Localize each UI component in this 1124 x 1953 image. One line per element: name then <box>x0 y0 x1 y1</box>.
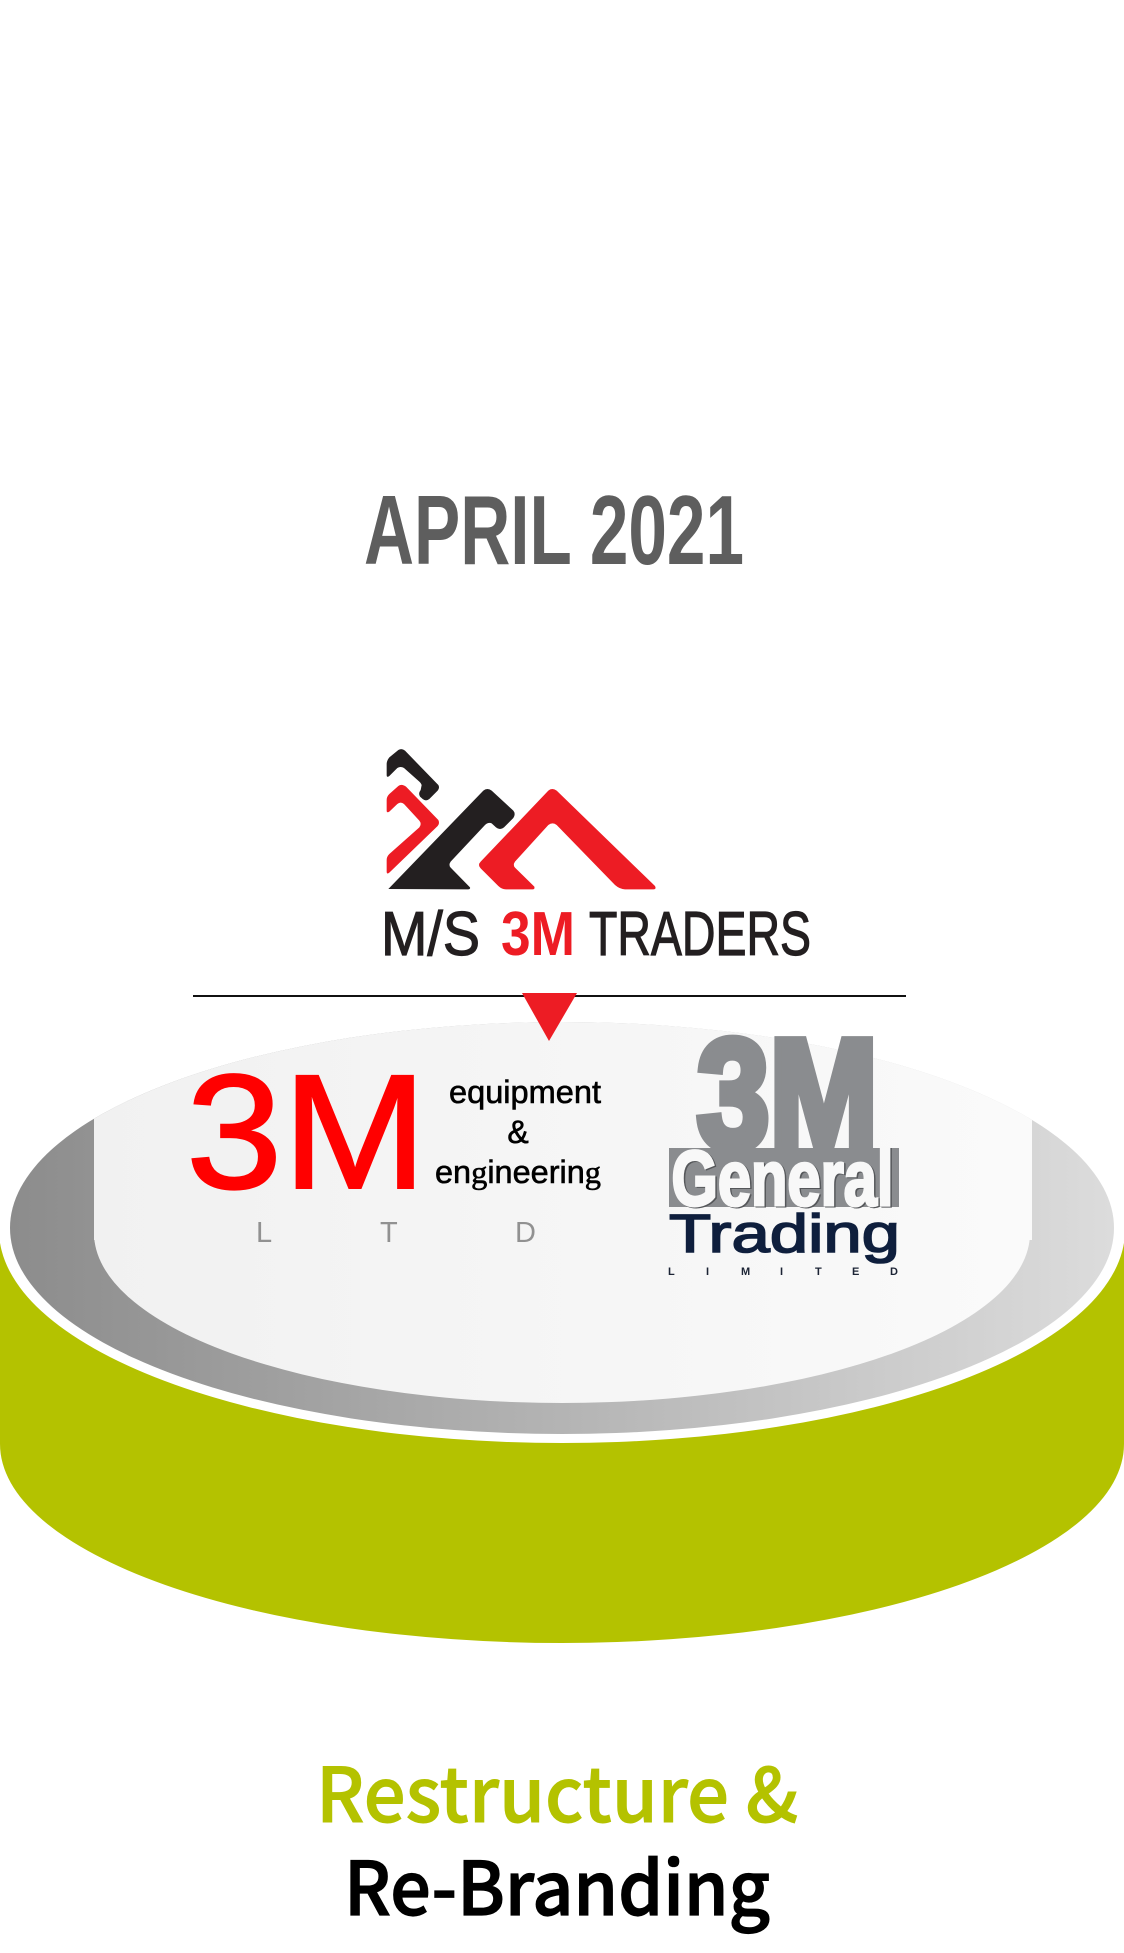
Trading text: Trading <box>669 1204 900 1264</box>
cylinder platform <box>0 1017 1124 1643</box>
LTD letters <box>256 1217 536 1249</box>
General knocked-out text: General <box>673 1135 895 1223</box>
LIMITED text: LIMITED <box>668 1266 898 1278</box>
icon: roof and hook mark <box>387 749 656 889</box>
LTD letters: T <box>380 1217 398 1249</box>
logo: 3M equipment and engineering <box>186 1040 601 1249</box>
white rim <box>0 1017 1124 1443</box>
infographic canvas <box>0 495 1124 1934</box>
3M red letters: 3M <box>186 1040 427 1223</box>
arrow: red down triangle <box>522 993 577 1041</box>
logo: 3M General Trading Limited <box>668 1008 900 1278</box>
logo wordmark <box>381 900 811 969</box>
LTD letters: L <box>256 1217 272 1249</box>
logo: M/S 3M Traders <box>381 749 811 969</box>
equipment and engineering text: & <box>507 1114 529 1150</box>
heading: April 2021: APRIL 2021 <box>364 475 744 585</box>
grey band <box>669 1148 899 1207</box>
grey disc <box>10 1022 1114 1434</box>
3M grey letters: 3M <box>697 1008 878 1182</box>
logo wordmark: 3M <box>501 900 575 969</box>
LTD letters: D <box>515 1217 536 1249</box>
caption <box>316 1735 798 1937</box>
equipment and engineering text: engineering <box>435 1154 601 1190</box>
caption line: Restructure &: Restructure & <box>316 1735 798 1844</box>
equipment and engineering text: equipment <box>449 1074 601 1110</box>
light inner panel <box>94 1022 1032 1403</box>
green cylinder body <box>0 1230 1124 1643</box>
caption line: Re-Branding: Re-Branding <box>344 1830 770 1937</box>
logo wordmark: M/S <box>381 900 480 969</box>
General knocked-out text: General <box>672 1134 894 1222</box>
equipment and engineering text <box>435 1074 601 1190</box>
logo wordmark: TRADERS <box>589 900 811 969</box>
divider line <box>193 995 906 997</box>
